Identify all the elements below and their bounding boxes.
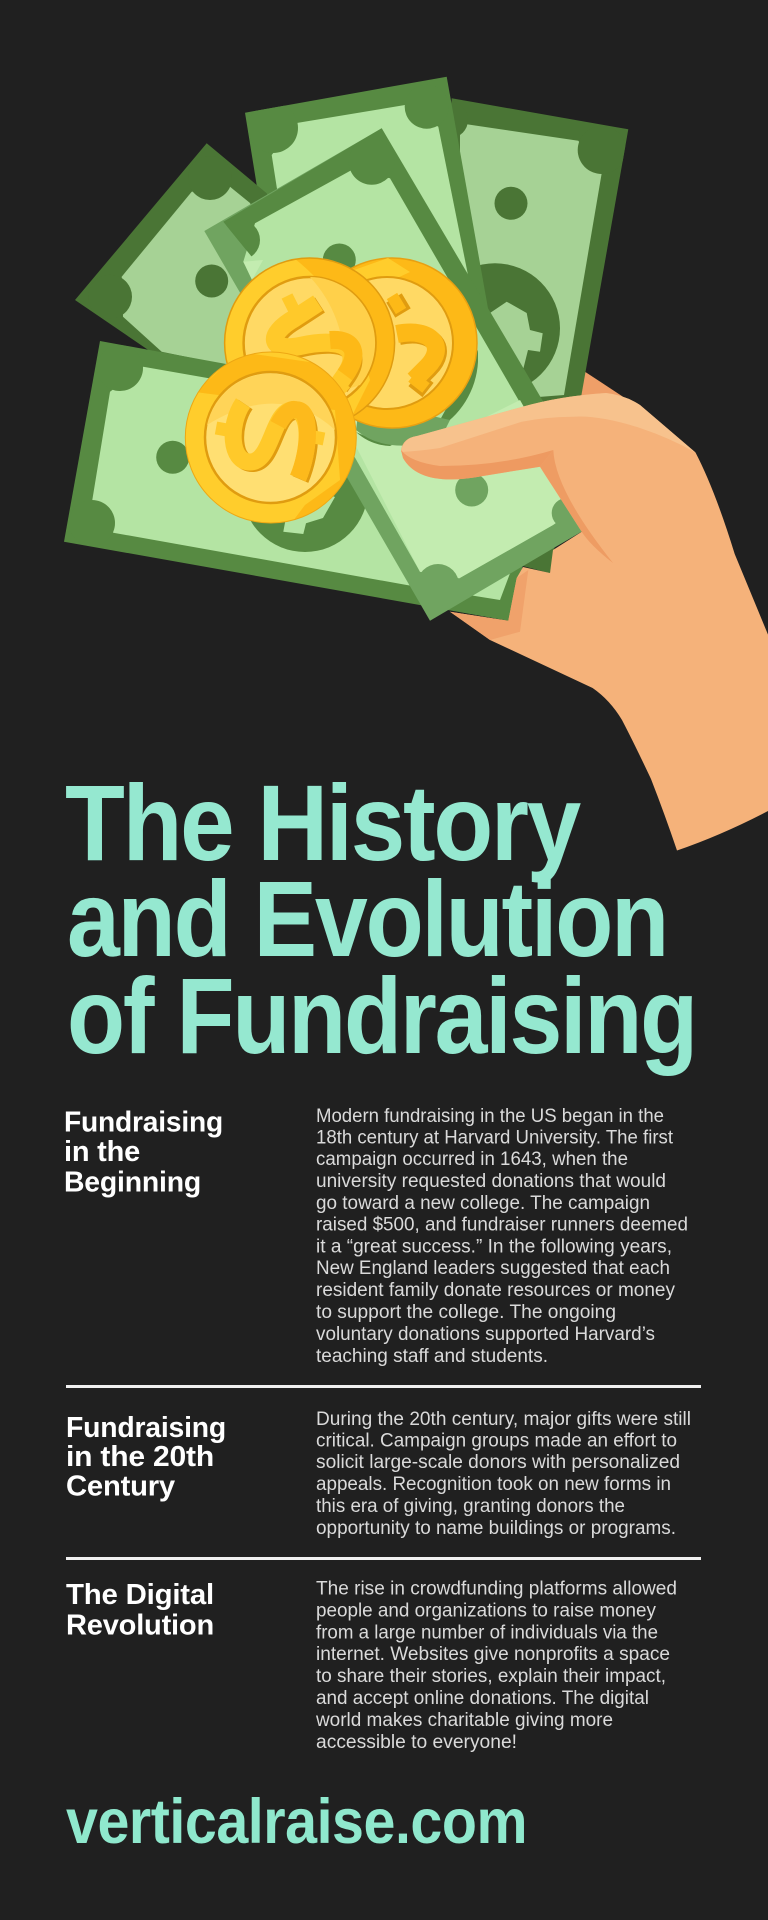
icon: dollar sign on middle coin xyxy=(275,296,353,392)
body text: Fundraising in the 20th Century: critical. Campaign groups made an effort to xyxy=(316,1430,677,1452)
body text: Fundraising in the Beginning: Modern fundraising in the US began in the xyxy=(316,1106,664,1127)
banknote: back right xyxy=(452,98,628,573)
body text: Fundraising in the 20th Century: During the 20th century, major gifts were still xyxy=(316,1409,691,1430)
body text: Fundraising in the Beginning: university requested donations that would xyxy=(316,1171,666,1192)
body text: Fundraising in the Beginning: resident family donate resources or money xyxy=(316,1280,675,1301)
section heading: The Digital Revolution: Revolution xyxy=(66,1610,214,1642)
body text: Fundraising in the 20th Century: opportunity to name buildings or programs. xyxy=(316,1518,676,1539)
icon: dollar sign on front coin xyxy=(216,403,324,480)
hand: thumb underside shadow xyxy=(401,450,553,479)
section heading: Fundraising in the 20th Century xyxy=(66,1412,226,1502)
section heading: The Digital Revolution: The Digital xyxy=(66,1579,214,1611)
section heading: Fundraising in the Beginning: Fundraising xyxy=(64,1107,223,1139)
section heading: Fundraising in the Beginning xyxy=(64,1107,223,1199)
section heading: Fundraising in the Beginning: in the xyxy=(64,1136,140,1168)
section heading: Fundraising in the 20th Century: Century xyxy=(66,1470,175,1502)
body text: Fundraising in the Beginning: campaign occurred in 1643, when the xyxy=(316,1149,628,1170)
body text: Fundraising in the Beginning: New England leaders suggested that each xyxy=(316,1258,670,1279)
hand: back of the palm xyxy=(575,372,623,400)
body text: Fundraising in the Beginning: raised $500, and fundraiser runners deemed xyxy=(316,1214,688,1236)
body text: The Digital Revolution xyxy=(315,1578,677,1753)
title: The History xyxy=(65,762,581,883)
body text: The Digital Revolution: internet. Websites give nonprofits a space xyxy=(316,1644,670,1665)
banknote: top xyxy=(245,77,488,330)
body text: The Digital Revolution: and accept online donations. The digital xyxy=(316,1688,649,1709)
body text: The Digital Revolution: to share their stories, explain their impact, xyxy=(316,1666,666,1687)
hand: thumb highlight xyxy=(401,393,696,452)
body text: Fundraising in the Beginning: teaching staff and students. xyxy=(316,1346,548,1367)
section heading: Fundraising in the 20th Century: in the 20th xyxy=(66,1441,214,1473)
body text: The Digital Revolution: accessible to everyone! xyxy=(316,1732,517,1753)
body text: Fundraising in the 20th Century: this era of giving, granting donors the xyxy=(316,1496,625,1517)
coin: right xyxy=(350,257,478,429)
website url: verticalraise.com xyxy=(66,1787,527,1857)
banknote: front xyxy=(204,128,604,621)
hand: palm and thumb xyxy=(401,393,768,850)
illustration: hand holding money and coins xyxy=(64,77,768,850)
body text: Fundraising in the Beginning: voluntary donations supported Harvard’s xyxy=(316,1324,655,1345)
body text: Fundraising in the Beginning: to support the college. The ongoing xyxy=(316,1302,616,1323)
body text: Fundraising in the Beginning: go toward a new college. The campaign xyxy=(316,1193,650,1214)
banknote: left xyxy=(75,143,267,364)
body text: The Digital Revolution: world makes charitable giving more xyxy=(315,1710,613,1731)
body text: Fundraising in the Beginning: it a “great success.” In the following years, xyxy=(316,1236,672,1258)
body text: The Digital Revolution: The rise in crowdfunding platforms allowed xyxy=(316,1578,677,1600)
coin: front xyxy=(185,352,370,525)
body text: Fundraising in the 20th Century: appeals. Recognition took on new forms in xyxy=(316,1474,671,1495)
icon: dollar sign on right coin xyxy=(392,296,438,390)
section heading: The Digital Revolution xyxy=(66,1579,214,1642)
title xyxy=(65,762,696,1076)
hand: palm crease xyxy=(540,450,613,563)
body text: The Digital Revolution: people and organizations to raise money xyxy=(316,1600,656,1622)
coin: middle xyxy=(224,257,396,416)
title: of Fundraising xyxy=(67,955,696,1076)
hand: lower finger shadow xyxy=(450,570,528,640)
body text: Fundraising in the Beginning xyxy=(316,1106,688,1367)
body text: Fundraising in the 20th Century xyxy=(316,1409,691,1539)
body text: Fundraising in the 20th Century: solicit large-scale donors with personalized xyxy=(316,1452,680,1473)
section heading: Fundraising in the Beginning: Beginning xyxy=(64,1167,201,1199)
section heading: Fundraising in the 20th Century: Fundraising xyxy=(66,1412,226,1444)
title: and Evolution xyxy=(67,858,667,979)
body text: The Digital Revolution: from a large number of individuals via the xyxy=(316,1622,658,1644)
banknote: bottom left xyxy=(64,341,560,621)
body text: Fundraising in the Beginning: 18th century at Harvard University. The first xyxy=(316,1128,674,1148)
